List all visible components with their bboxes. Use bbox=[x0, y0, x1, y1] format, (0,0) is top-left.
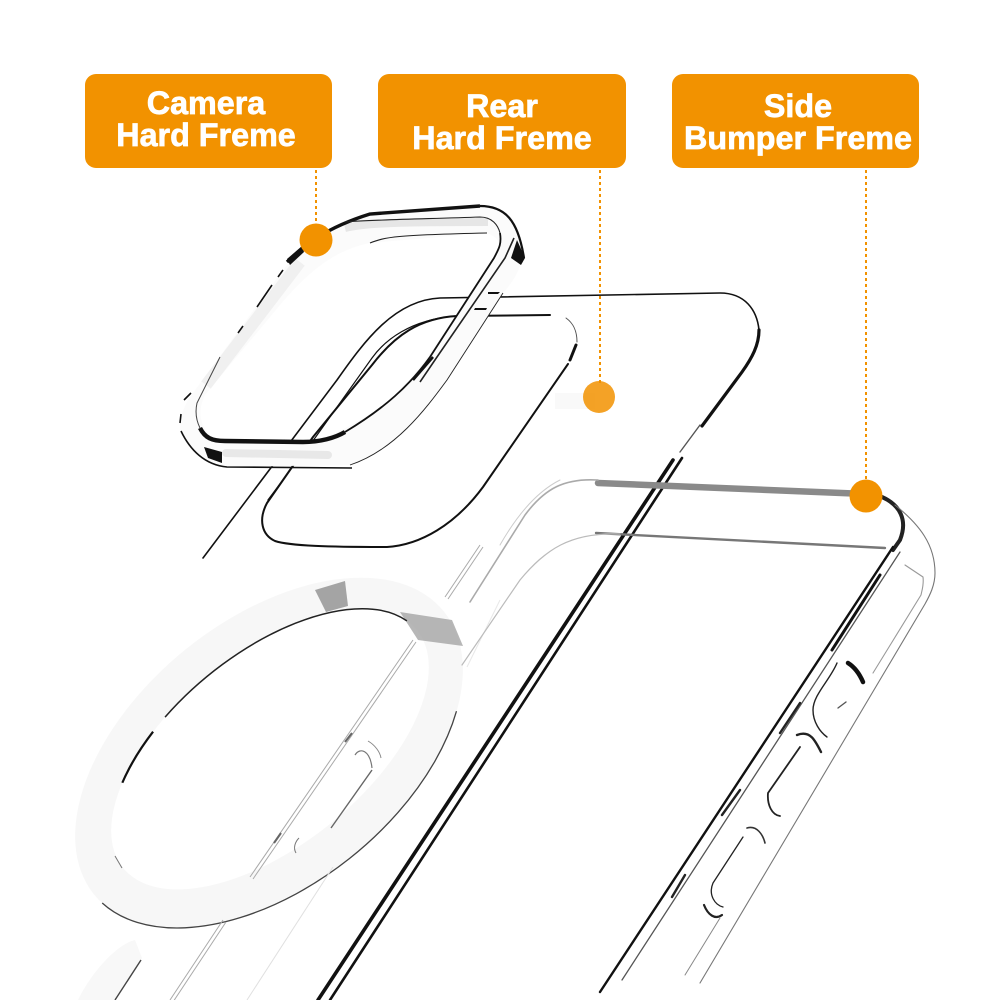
side bumper frame bbox=[462, 480, 935, 992]
camera hard frame bbox=[180, 205, 525, 468]
marker: camera bbox=[300, 224, 332, 256]
thin case edge through ring bbox=[170, 545, 500, 1000]
label: side bumper frame: Side bbox=[764, 88, 832, 124]
label: rear hard frame bbox=[378, 74, 626, 168]
callout line: rear bbox=[599, 170, 601, 384]
rear hard frame plate bbox=[203, 293, 759, 1000]
magnetic ring bbox=[10, 508, 528, 998]
label: camera hard frame bbox=[85, 74, 332, 168]
label: camera hard frame: Hard Freme bbox=[116, 117, 296, 153]
main rail bbox=[600, 547, 893, 992]
label: rear hard frame: Hard Freme bbox=[412, 120, 592, 156]
label: camera hard frame: Camera bbox=[147, 85, 266, 121]
camera/power openings bbox=[813, 663, 837, 737]
marker: rear bbox=[583, 381, 615, 413]
callout line: camera bbox=[315, 170, 317, 226]
top bar bbox=[598, 483, 866, 494]
callout line: side bbox=[865, 170, 867, 482]
rear plate highlight bbox=[555, 393, 595, 409]
label: side bumper frame bbox=[672, 74, 919, 168]
ring ghost bottom bbox=[78, 940, 142, 1000]
camera cutout bbox=[262, 315, 568, 547]
label: side bumper frame: Bumper Freme bbox=[684, 120, 912, 156]
label: rear hard frame: Rear bbox=[466, 88, 538, 124]
corner bbox=[882, 497, 903, 550]
marker: side bbox=[850, 480, 882, 512]
